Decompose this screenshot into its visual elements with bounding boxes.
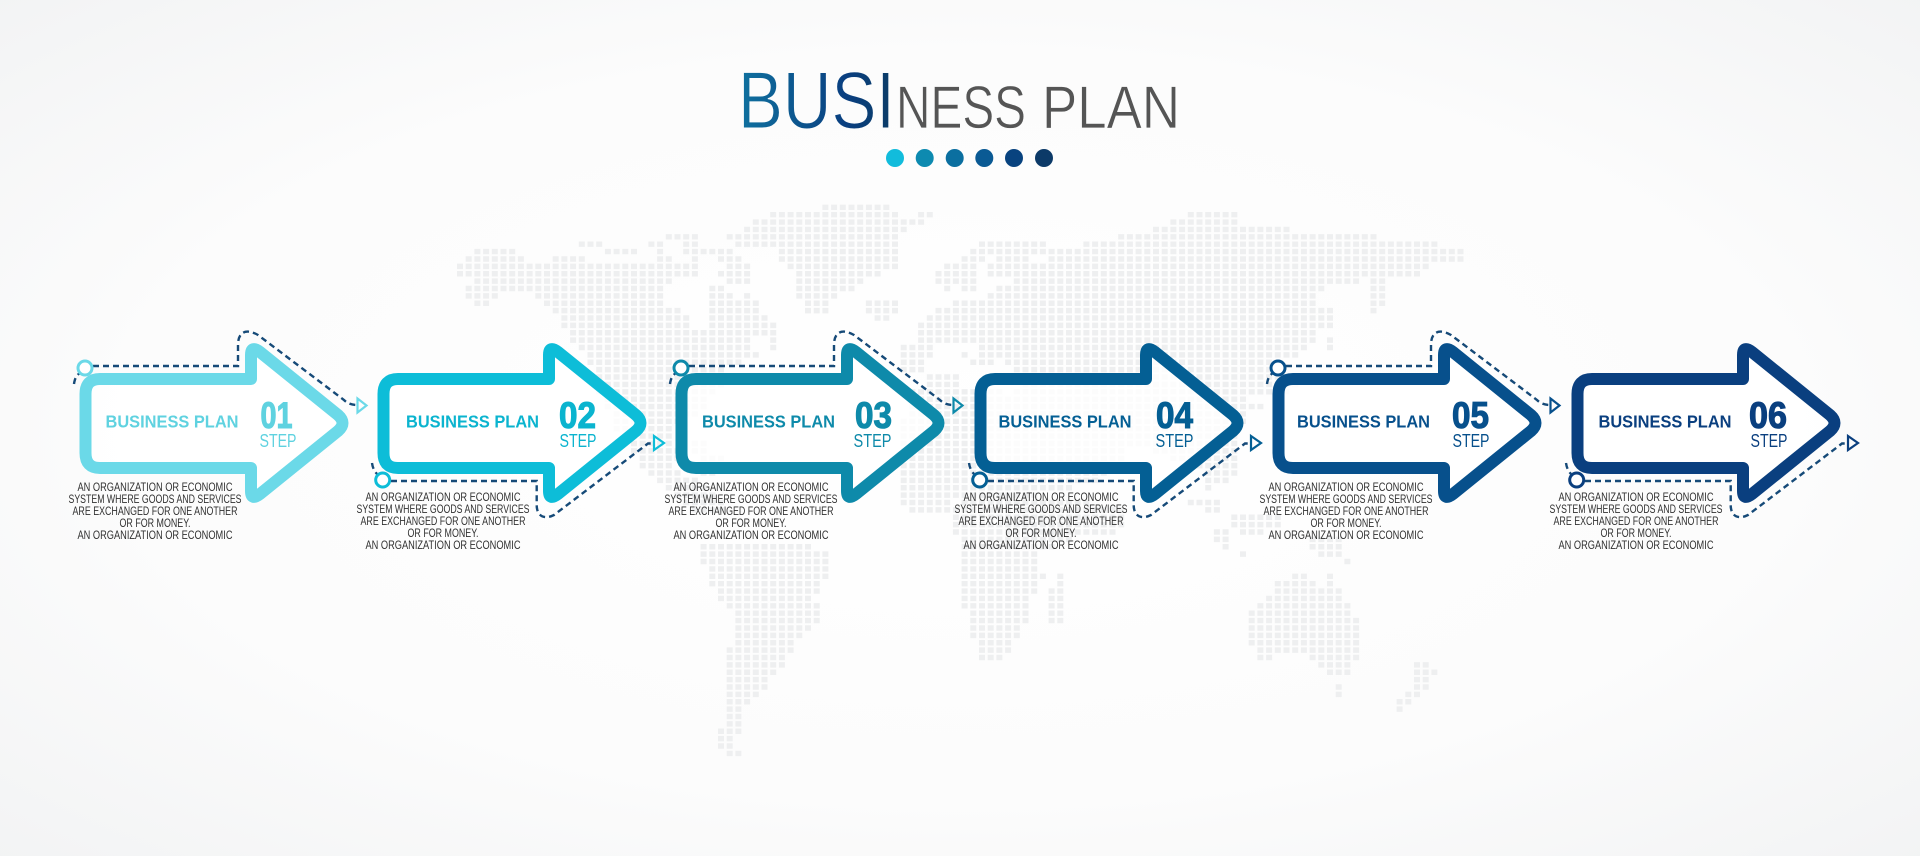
description 03: AN ORGANIZATION OR ECONOMIC — [674, 481, 828, 494]
arrow 02 — [384, 349, 640, 497]
label 04: BUSINESS PLAN — [998, 412, 1132, 432]
number 06: 06 — [1749, 395, 1787, 436]
step word 02: STEP — [560, 431, 596, 451]
title: NESS — [896, 74, 1026, 141]
description 01: AN ORGANIZATION OR ECONOMIC — [78, 529, 232, 542]
title: PLAN — [1042, 74, 1180, 141]
panel: step 06 — [1550, 349, 1858, 552]
description 01: OR FOR MONEY. — [120, 517, 190, 530]
description 06: AN ORGANIZATION OR ECONOMIC — [1558, 539, 1714, 552]
description 03: AN ORGANIZATION OR ECONOMIC — [674, 529, 828, 542]
panel: step 05 — [1260, 332, 1560, 542]
dashed connector 02 — [372, 436, 664, 517]
description 06: SYSTEM WHERE GOODS AND SERVICES — [1550, 503, 1723, 516]
step word 01: STEP — [260, 431, 296, 451]
description 05: AN ORGANIZATION OR ECONOMIC — [1268, 481, 1424, 494]
dashed connector 05 — [1267, 332, 1560, 412]
description 05: AN ORGANIZATION OR ECONOMIC — [1268, 529, 1424, 542]
description 01: SYSTEM WHERE GOODS AND SERVICES — [68, 493, 242, 506]
dashed connector 01 — [74, 332, 366, 412]
world map of dots — [457, 207, 1466, 753]
description 02: ARE EXCHANGED FOR ONE ANOTHER — [360, 515, 526, 528]
step word 03: STEP — [854, 431, 892, 451]
arrow 03 — [682, 349, 938, 497]
description 02: SYSTEM WHERE GOODS AND SERVICES — [356, 503, 530, 516]
dashed connector 04 — [969, 436, 1261, 517]
description 01: AN ORGANIZATION OR ECONOMIC — [78, 481, 232, 494]
description 04: SYSTEM WHERE GOODS AND SERVICES — [954, 503, 1128, 516]
description 02: OR FOR MONEY. — [408, 527, 478, 540]
number 02: 02 — [559, 395, 596, 436]
description 04: AN ORGANIZATION OR ECONOMIC — [964, 539, 1118, 552]
arrow 05 — [1278, 349, 1536, 497]
description 04: AN ORGANIZATION OR ECONOMIC — [964, 491, 1118, 504]
description 02: AN ORGANIZATION OR ECONOMIC — [366, 539, 520, 552]
number 04: 04 — [1156, 395, 1193, 436]
panel: step 04 — [954, 349, 1261, 552]
description 04: OR FOR MONEY. — [1006, 527, 1076, 540]
dashed connector 03 — [670, 332, 962, 412]
description 03: SYSTEM WHERE GOODS AND SERVICES — [664, 493, 838, 506]
label 05: BUSINESS PLAN — [1297, 412, 1430, 432]
description 06: ARE EXCHANGED FOR ONE ANOTHER — [1554, 515, 1718, 528]
title colour dots — [886, 149, 1053, 167]
dashed connector 06 — [1566, 436, 1858, 517]
panel: step 03 — [664, 332, 962, 542]
number 01: 01 — [260, 395, 292, 436]
description 05: OR FOR MONEY. — [1310, 517, 1382, 530]
label 06: BUSINESS PLAN — [1598, 412, 1732, 432]
description 03: ARE EXCHANGED FOR ONE ANOTHER — [668, 505, 834, 518]
description 04: ARE EXCHANGED FOR ONE ANOTHER — [958, 515, 1124, 528]
description 01: ARE EXCHANGED FOR ONE ANOTHER — [72, 505, 238, 518]
label 01: BUSINESS PLAN — [106, 412, 238, 432]
description 05: SYSTEM WHERE GOODS AND SERVICES — [1260, 493, 1433, 506]
title — [738, 56, 1180, 146]
description 06: OR FOR MONEY. — [1600, 527, 1672, 540]
arrow 06 — [1578, 349, 1834, 497]
panel: step 01 — [68, 332, 366, 542]
arrow 04 — [980, 349, 1238, 497]
description 03: OR FOR MONEY. — [716, 517, 786, 530]
number 03: 03 — [855, 395, 892, 436]
label 03: BUSINESS PLAN — [702, 412, 835, 432]
step word 05: STEP — [1452, 431, 1490, 451]
description 02: AN ORGANIZATION OR ECONOMIC — [366, 491, 520, 504]
title: BUSI — [738, 56, 895, 146]
panel: step 02 — [356, 349, 664, 552]
number 05: 05 — [1452, 395, 1489, 436]
step word 06: STEP — [1750, 431, 1788, 451]
step word 04: STEP — [1156, 431, 1194, 451]
description 05: ARE EXCHANGED FOR ONE ANOTHER — [1264, 505, 1428, 518]
description 06: AN ORGANIZATION OR ECONOMIC — [1558, 491, 1714, 504]
label 02: BUSINESS PLAN — [406, 412, 539, 432]
arrow 01 — [86, 349, 342, 497]
